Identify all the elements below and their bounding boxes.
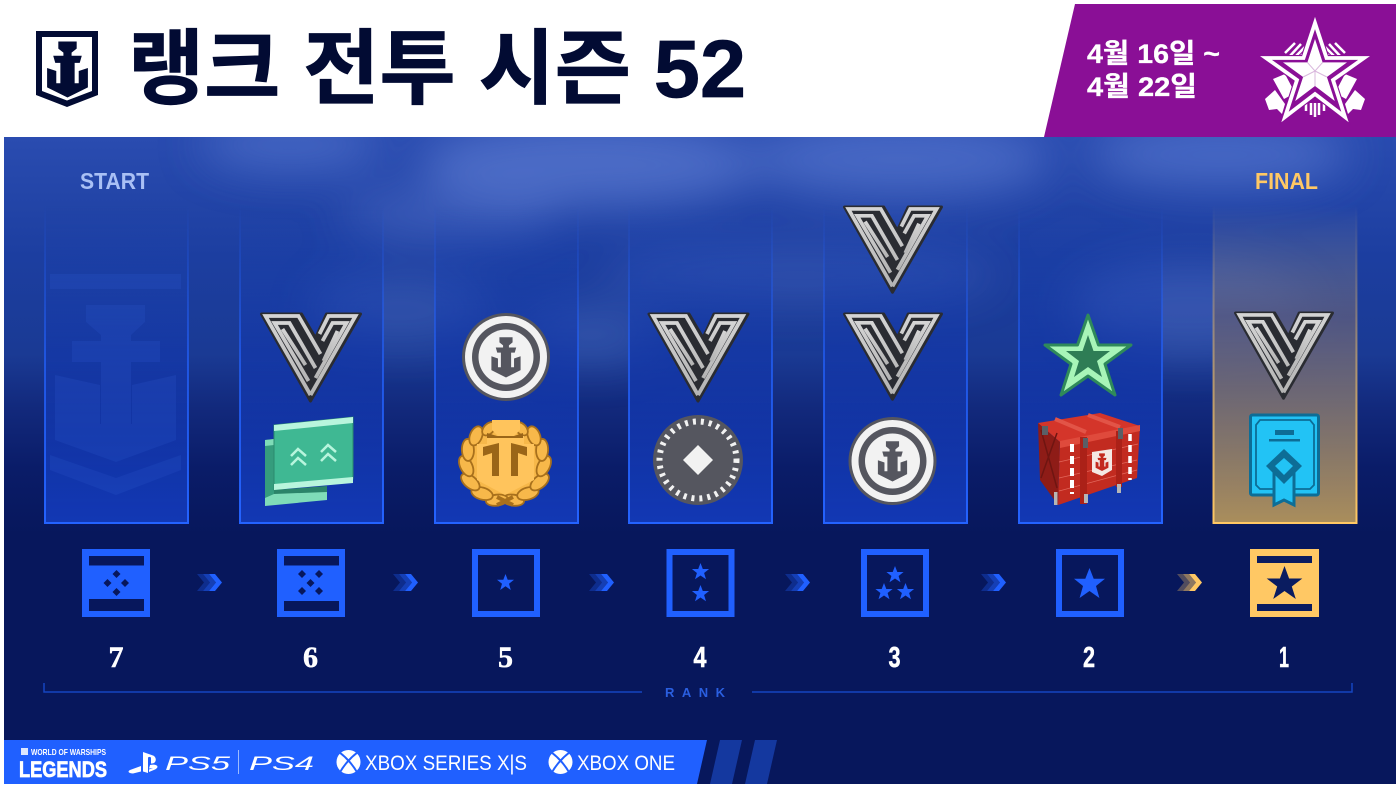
rank numbers: 2 bbox=[1083, 642, 1095, 674]
icon: green ticket bbox=[265, 417, 353, 506]
icon: faint shield watermark bbox=[50, 274, 181, 495]
title: 랭크 전투 시즌 52 bbox=[128, 24, 746, 115]
rank axis line bbox=[44, 683, 1352, 692]
date text: 4월 16일 ~ bbox=[1087, 39, 1220, 69]
label: PS4: PS4 bbox=[249, 754, 314, 775]
label: final: FINAL bbox=[1255, 168, 1318, 194]
icon: chevron rank insignia bbox=[1235, 313, 1332, 398]
icon: star badge bbox=[1265, 23, 1365, 117]
icon: chevron rank insignia bottom bbox=[844, 314, 942, 399]
label: xbox one: XBOX ONE bbox=[577, 752, 675, 775]
rank icon 1 bbox=[1250, 549, 1319, 617]
arrow 7 to 6 bbox=[197, 574, 222, 591]
arrow 4 to 3 bbox=[785, 574, 810, 591]
column: rank 7 bbox=[45, 205, 188, 523]
icon: xbox bbox=[336, 750, 360, 774]
arrow 6 to 5 bbox=[393, 574, 418, 591]
column: rank 5 bbox=[435, 205, 578, 523]
label: PS5: PS5 bbox=[165, 754, 231, 775]
rank numbers: 1 bbox=[1279, 642, 1289, 674]
divider bbox=[238, 750, 239, 774]
icon: anchor medal bbox=[462, 313, 550, 401]
column: rank 6 bbox=[240, 205, 383, 523]
date text bbox=[1087, 39, 1220, 102]
column: rank 4 bbox=[629, 205, 772, 523]
column: rank 3 bbox=[824, 205, 967, 523]
label: xbox series: XBOX SERIES X|S bbox=[365, 752, 527, 775]
logo: world of warships legends bbox=[19, 747, 107, 782]
rank icon 3 bbox=[864, 552, 926, 614]
rank icon 6 bbox=[277, 549, 345, 617]
arrow 5 to 4 bbox=[589, 574, 614, 591]
rank numbers bbox=[108, 641, 1289, 674]
header logo shield bbox=[36, 31, 98, 107]
rank icon 7 bbox=[82, 549, 150, 617]
background panel bbox=[4, 119, 1396, 740]
date text: 4월 22일 bbox=[1087, 72, 1197, 102]
date banner bbox=[1044, 4, 1396, 137]
label: start: START bbox=[80, 168, 149, 194]
column: rank 1 bbox=[1214, 205, 1356, 523]
rank label: RANK bbox=[665, 685, 733, 700]
icon: chevron rank insignia bbox=[649, 314, 748, 401]
logo: world of warships legends: LEGENDS bbox=[19, 757, 107, 782]
icon: red crate bbox=[1038, 413, 1140, 505]
icon: striped disc bbox=[653, 415, 743, 505]
icon: green star bbox=[1045, 315, 1131, 395]
rank numbers: 4 bbox=[694, 642, 706, 674]
logo: playstation bbox=[129, 752, 157, 774]
rank icon 2 bbox=[1059, 552, 1121, 614]
logo: world of warships legends: WORLD OF WARSHIPS bbox=[31, 747, 106, 757]
rank icon 5 bbox=[475, 552, 537, 614]
icon: chevron rank insignia top bbox=[844, 207, 942, 292]
column: rank 2 bbox=[1019, 205, 1162, 523]
icon: anchor medal bbox=[848, 417, 936, 505]
rank icon 4 bbox=[670, 552, 732, 614]
icon: xbox bbox=[548, 750, 572, 774]
icon: gold laurel shield bbox=[456, 420, 554, 507]
rank numbers: 7 bbox=[108, 641, 124, 674]
icon: blue certificate bbox=[1250, 415, 1318, 505]
rank numbers: 3 bbox=[888, 642, 900, 674]
arrow 3 to 2 bbox=[981, 574, 1006, 591]
rank numbers: 6 bbox=[303, 641, 318, 674]
decorative footer stripes bbox=[710, 740, 777, 784]
arrow 2 to 1 bbox=[1177, 574, 1202, 591]
footer bbox=[4, 740, 1396, 784]
rank numbers: 5 bbox=[498, 641, 513, 674]
icon: chevron rank insignia bbox=[262, 314, 360, 401]
